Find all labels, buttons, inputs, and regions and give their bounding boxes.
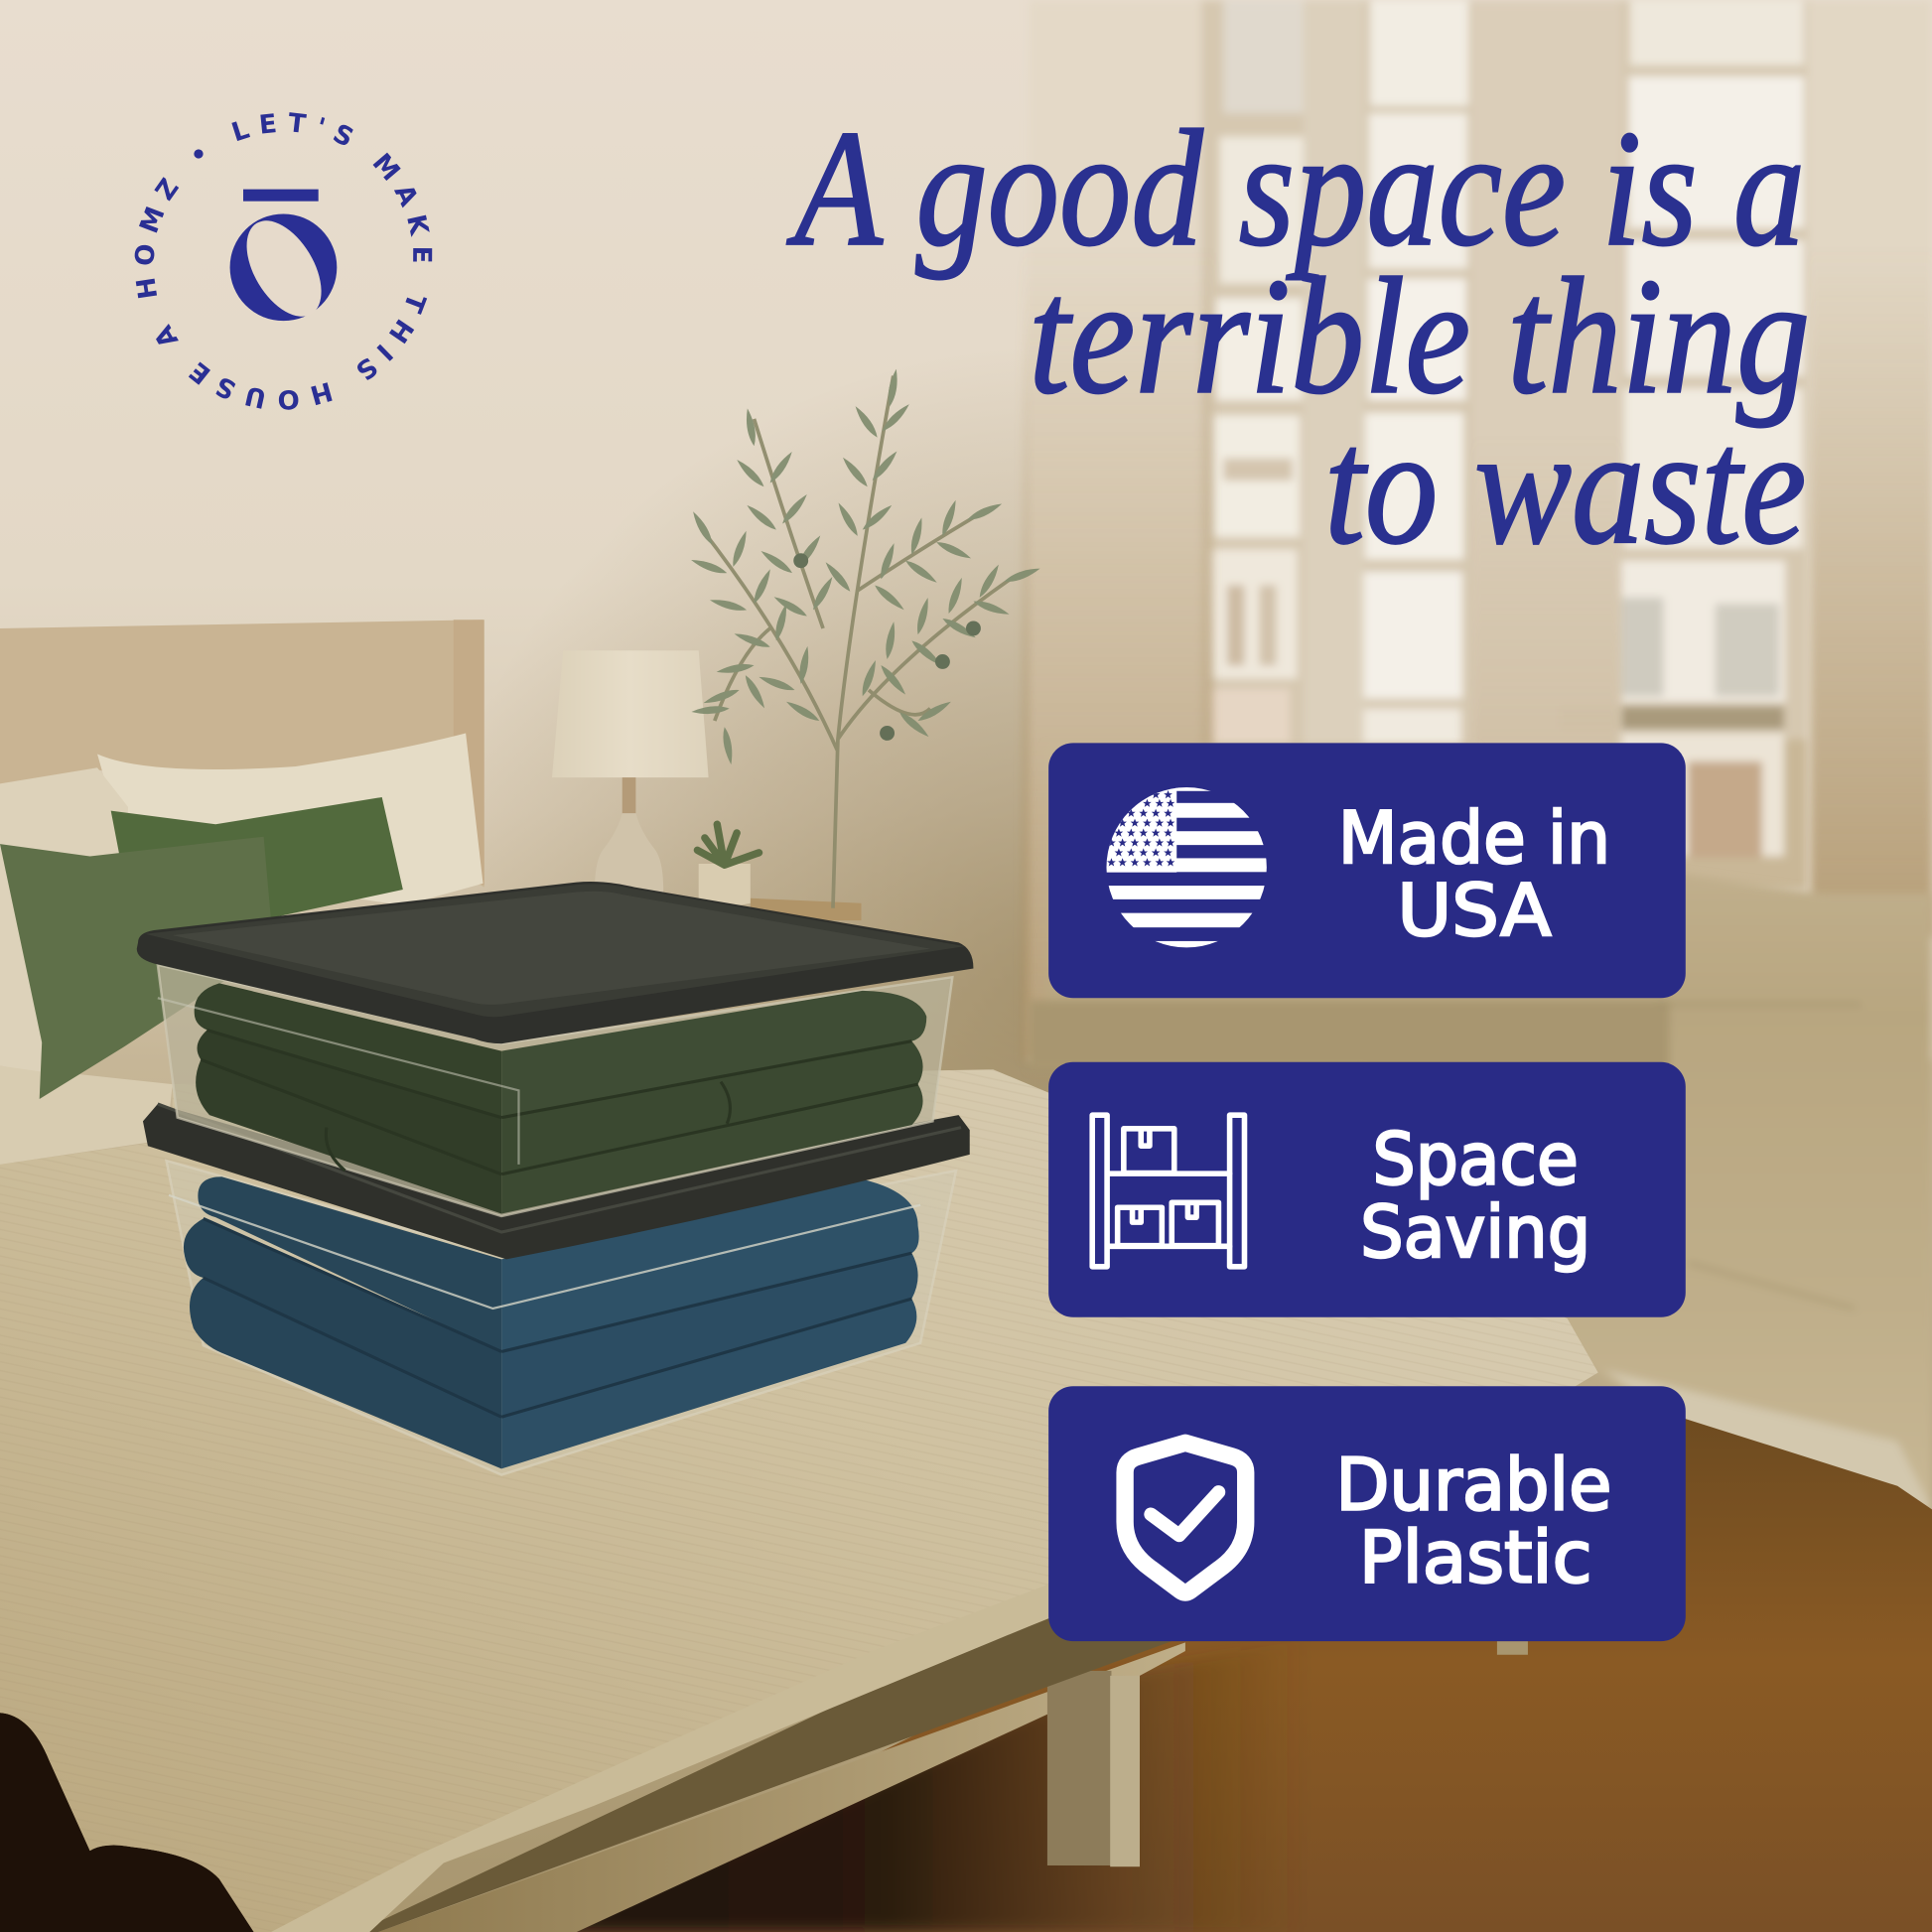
wooden floor xyxy=(517,1392,1932,1932)
badge: Durable Plastic xyxy=(1048,1386,1686,1641)
badge label: Made in USA: USA xyxy=(1397,869,1552,952)
lower lid xyxy=(143,1104,970,1259)
badge label: Made in USA xyxy=(1338,796,1610,952)
shadow below bedspread hem xyxy=(357,1614,1195,1932)
bedspread texture xyxy=(0,1069,1598,1932)
folded top sheet xyxy=(0,1066,173,1165)
dark gap at lower left of bed xyxy=(0,1713,254,1932)
logo badge xyxy=(135,112,433,410)
badge label: Durable Plastic xyxy=(1335,1443,1611,1599)
curtain fade at lower left xyxy=(1023,246,1213,1059)
lower box: clear plastic shell xyxy=(167,1161,956,1475)
headboard xyxy=(0,620,484,888)
window and curtains xyxy=(1029,0,1932,1059)
bedspread xyxy=(0,1069,1598,1932)
upper box: clear plastic shell xyxy=(158,965,952,1216)
bedspread hem xyxy=(271,1568,1072,1932)
icon: American flag circle xyxy=(1103,783,1276,948)
logo macron bar xyxy=(243,190,319,202)
pillows xyxy=(0,733,483,1099)
logo circular tagline: • LET'S MAKE THIS HOUSE A HOMZ xyxy=(135,112,433,410)
headline line 3: to waste xyxy=(1324,395,1806,579)
lower box contents: blue blankets xyxy=(184,1176,919,1468)
small potted plant xyxy=(697,824,759,906)
headline line 1: A good space is a xyxy=(786,97,1805,281)
bedside table xyxy=(751,898,862,920)
product: stacked storage boxes xyxy=(137,882,973,1475)
upper lid xyxy=(137,882,973,1043)
curtain fade at lower right xyxy=(1811,246,1932,936)
logo ring mark xyxy=(230,207,337,330)
icon: shield with check mark xyxy=(1125,1443,1246,1592)
lower box rim highlight xyxy=(169,1195,920,1309)
badge label: Durable Plastic: Plastic xyxy=(1359,1516,1591,1599)
upper box rim highlight xyxy=(158,998,518,1165)
badge: Made in USA xyxy=(1048,743,1686,998)
badge label: Made in USA: Made in xyxy=(1338,796,1610,880)
upper box contents: green blankets xyxy=(195,983,926,1213)
badge: Space Saving xyxy=(1048,1062,1686,1317)
badge label: Space Saving: Saving xyxy=(1360,1190,1590,1274)
bed frame xyxy=(378,1641,1528,1932)
badge label: Space Saving xyxy=(1360,1118,1590,1274)
curtain fade middle xyxy=(1472,431,1620,1059)
badge label: Durable Plastic: Durable xyxy=(1335,1443,1611,1526)
under-bed shadow on floor xyxy=(542,1639,1307,1932)
headline line 2: terrible thing xyxy=(1029,245,1810,429)
lower wall and door panels xyxy=(1029,746,1932,1516)
table lamp xyxy=(552,650,709,905)
wall shading toward the curtains xyxy=(419,345,1701,1626)
olive tree xyxy=(690,368,1041,908)
badge label: Space Saving: Space xyxy=(1373,1118,1579,1201)
icon: storage shelf with boxes xyxy=(1092,1115,1244,1267)
headline xyxy=(786,97,1810,579)
